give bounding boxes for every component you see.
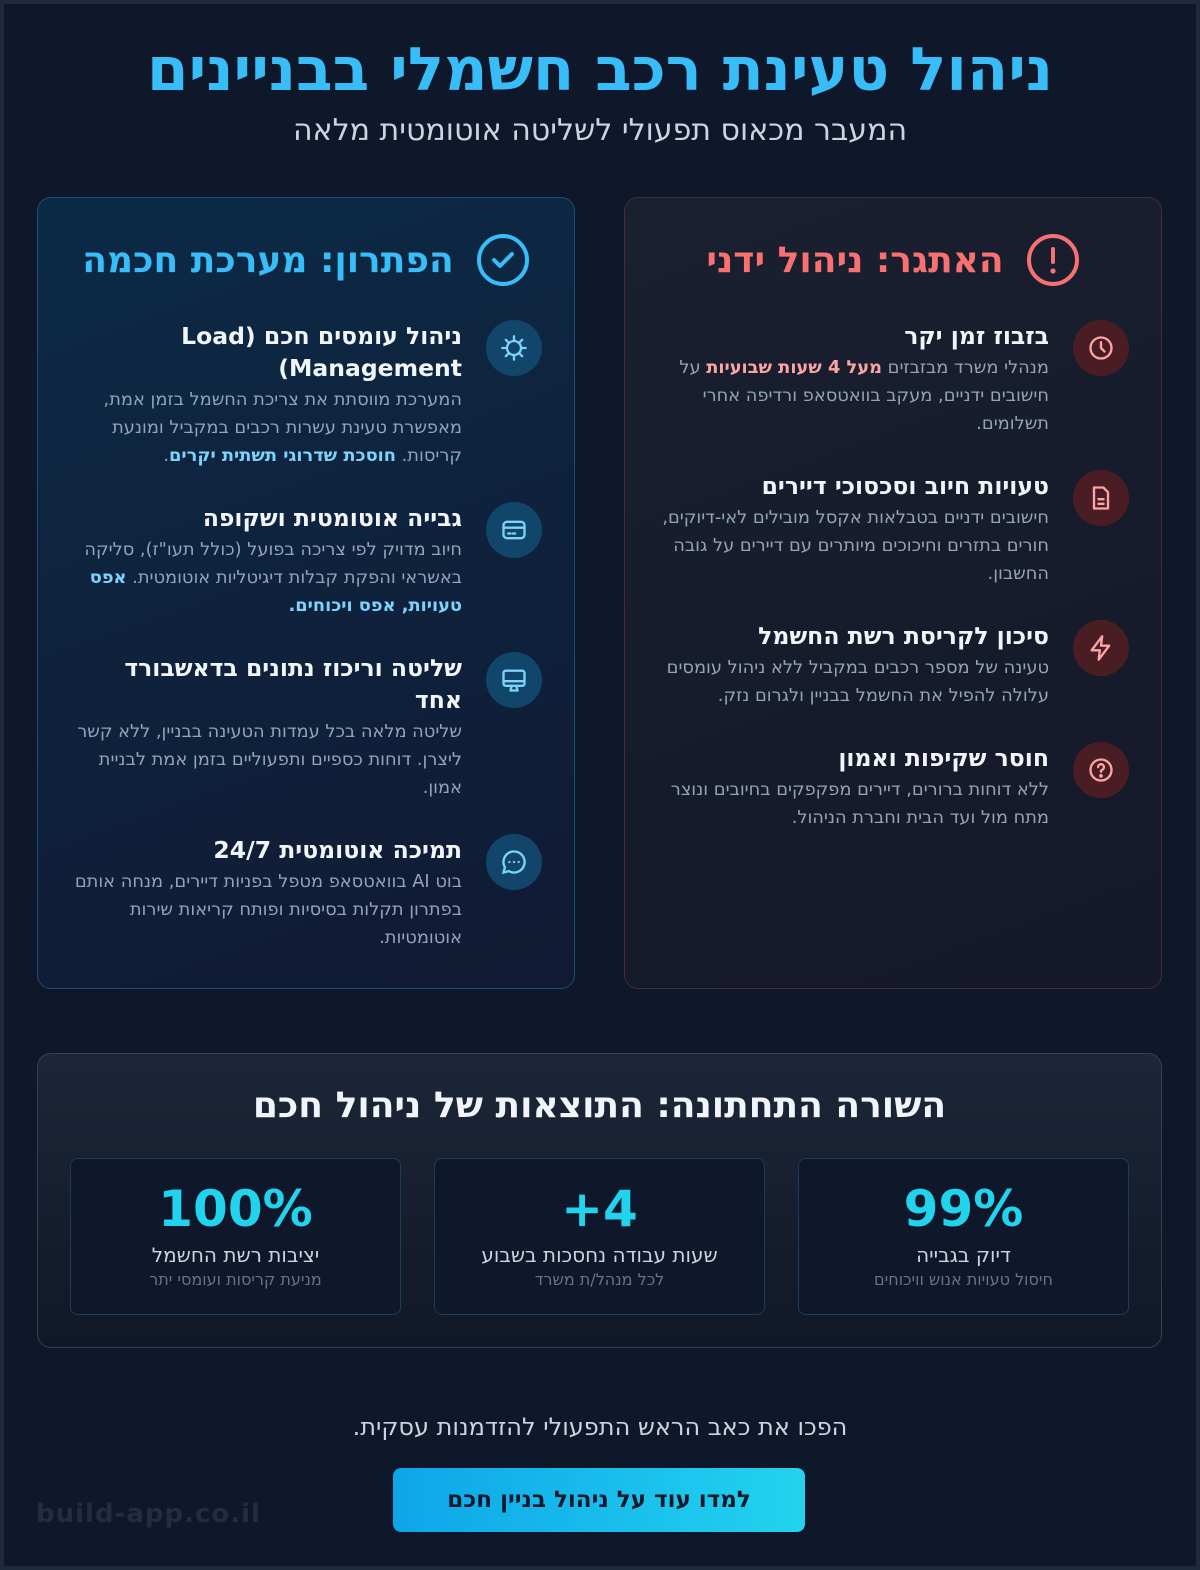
icon: clock [1073,320,1129,376]
stat: +4: שעות עבודה נחסכות בשבוע [481,1243,718,1267]
item: load management [104,320,542,466]
item: dashboard: שליטה מלאה בכל עמדות הטעינה בבניין, ללא קשר ליצרן. דוחות כספיים ותפעוליים בזמן אמת לבניית אמון. [77,721,462,798]
item: grid risk: טעינה של מספר רכבים במקביל ללא ניהול עומסים עלולה להפיל את החשמל בבניין ולגרום נזק. [667,657,1049,706]
icon: chip [486,320,542,376]
stat: +4: +4 [561,1180,638,1238]
icon: monitor [486,652,542,708]
stat: 99%: דיוק בגבייה [916,1243,1011,1267]
item: billing errors: טעויות חיוב וסכסוכי דיירים [762,472,1049,500]
icon: lightning [1073,620,1129,676]
button [393,1468,805,1532]
item: automatic billing: גבייה אוטומטית ושקופה [203,504,462,532]
title: ניהול טעינת רכב חשמלי בבניינים [147,35,1053,105]
item: support: בוט AI בוואטסאפ מטפל בפניות דיירים, מנחה אותם בפתרון תקלות בסיסיות ופותח קריאות שירות אוטומטיות. [75,871,462,948]
item: support [75,834,542,948]
button: למדו עוד על ניהול בניין חכם [447,1487,751,1513]
icon: question [1073,742,1129,798]
panel: results [37,1053,1162,1348]
solution heading [82,234,529,286]
item: dashboard [77,652,542,798]
challenge heading: האתגר: ניהול ידני [706,240,1004,280]
item: wasted time [679,320,1129,434]
item: wasted time: מנהלי משרד מבזבזים מעל 4 שעות שבועיות על חישובים ידניים, מעקב בוואטסאפ ורדיפה אחרי תשלומים. [679,357,1049,434]
watermark: build-app.co.il [36,1499,261,1529]
stat: +4 [434,1158,765,1315]
solution heading: הפתרון: מערכת חכמה [82,240,454,280]
stat: 100%: 100% [158,1180,313,1238]
stat: 100%: יציבות רשת החשמל [152,1243,319,1267]
icon: document [1073,470,1129,526]
stat: 99% [798,1158,1129,1315]
stat: 100%: מניעת קריסות ועומסי יתר [149,1270,322,1289]
stat: 100% [70,1158,401,1315]
item: dashboard: שליטה וריכוז נתונים בדאשבורד אחד [124,654,462,714]
item: load management: ניהול עומסים חכם (Load Management) [181,322,462,382]
subtitle: המעבר מכאוס תפעולי לשליטה אוטומטית מלאה [293,113,907,148]
panel: challenge [624,197,1162,989]
item: transparency: ללא דוחות ברורים, דיירים מפקפקים בחיובים ונוצר מתח מול ועד הבית וחברת הניהול. [671,779,1049,828]
item: load management: המערכת מווסתת את צריכת החשמל בזמן אמת, מאפשרת טעינת עשרות רכבים במקביל ומונעת קריסות. חוסכת שדרוגי תשתית יקרים. [104,389,462,466]
footer text: הפכו את כאב הראש התפעולי להזדמנות עסקית. [353,1413,847,1441]
item: transparency: חוסר שקיפות ואמון [838,744,1049,772]
item: grid risk [667,620,1129,706]
stat: 99%: חיסול טעויות אנוש וויכוחים [874,1270,1053,1289]
item: automatic billing [84,502,542,616]
item: wasted time: בזבוז זמן יקר [904,322,1049,350]
icon: card [486,502,542,558]
item: automatic billing: חיוב מדויק לפי צריכה בפועל (כולל תעו"ז), סליקה באשראי והפקת קבלות דיגיטליות אוטומטית. אפס טעויות, אפס ויכוחים. [84,539,462,616]
results heading: השורה התחתונה: התוצאות של ניהול חכם [253,1085,946,1126]
stat: 99%: 99% [904,1180,1023,1238]
icon: chat [486,834,542,890]
challenge heading [706,234,1079,286]
panel: solution [37,197,575,989]
item: billing errors [662,470,1129,584]
stat: +4: לכל מנהל/ת משרד [535,1270,664,1289]
item: grid risk: סיכון לקריסת רשת החשמל [758,622,1049,650]
item: billing errors: חישובים ידניים בטבלאות אקסל מובילים לאי-דיוקים, חורים בתזרים וחיכוכים מיותרים עם דיירים על גובה החשבון. [662,507,1049,584]
item: support: תמיכה אוטומטית 24/7 [213,836,462,864]
item: transparency [671,742,1129,828]
